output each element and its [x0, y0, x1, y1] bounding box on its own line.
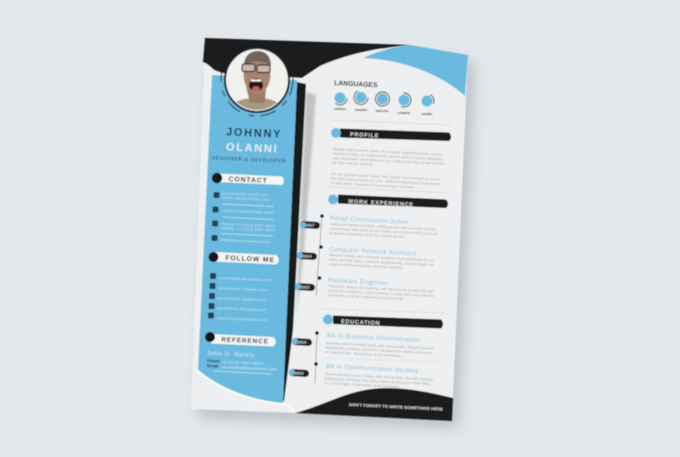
education heading: EDUCATION [341, 319, 380, 327]
contact dividers [221, 204, 274, 236]
profile section [330, 128, 451, 191]
contact row: phone: Mobile: +1 (123) 4567 8910 [221, 226, 275, 232]
degree 1 divider [325, 358, 441, 362]
reference phone value: +1 (123) 4567 8910 [221, 360, 263, 366]
job 1: a great company and its vision goals. [329, 231, 406, 239]
degree 2: in corporate, business and strategy. [324, 381, 401, 389]
profile text: working online, an enthusiastic person and an expert designer [333, 151, 444, 161]
profile text [330, 147, 445, 191]
social: linkedin: yourname.linkedin.com [217, 306, 267, 312]
sidebar white edge [197, 370, 295, 412]
social: twitter: yourname.twitter.com [218, 286, 268, 292]
paper shadow [198, 46, 475, 428]
contact heading [212, 173, 284, 185]
degree 1: in corporate, business and strategy. [325, 350, 402, 358]
contact row: address: STATE, ZIP/POSTCODE, USA [222, 196, 271, 202]
job 2: a good and complete internal system. [328, 262, 405, 270]
education divider [322, 309, 445, 313]
profile text: the idea and concept on your, skilled professional experience [330, 176, 441, 186]
job title: DESIGNER & DEVELOPER [212, 155, 287, 164]
contact row: phone: Phone: +1 (123) 4567 8910 [221, 222, 275, 228]
top black shape [203, 38, 410, 78]
dashed outer ring [221, 44, 293, 116]
grey column shadow [296, 92, 316, 320]
job 1: experience with skills for our team and a work ethic to reach [330, 226, 438, 236]
portrait [236, 50, 278, 111]
social: pinterest: yourname.pinterest.com [217, 316, 267, 322]
language: spanish: SPANISH [355, 108, 367, 112]
degree 1: leading the company and team, management studies and more [326, 345, 432, 355]
languages heading: LANGUAGES [334, 80, 378, 89]
social list [208, 273, 271, 322]
social: facebook: yourname.facebook.com [219, 276, 271, 282]
education timeline [315, 333, 317, 383]
degree 1: 2010 [298, 340, 306, 344]
job 2: Network design and computer systems, built and tested for our [329, 253, 436, 263]
job 1: Sales and marketing online, selling across and customer service [330, 222, 436, 232]
top right blue shape [363, 45, 468, 96]
social: skype: yourname.skype.com [217, 296, 267, 302]
job 2: 2014 [303, 254, 312, 258]
education section [289, 314, 443, 391]
work experience bar [338, 194, 448, 208]
reference heading: REFERENCE [221, 336, 269, 346]
degree 2: Communication study online, with strong skills, thought process [325, 372, 433, 382]
name [212, 126, 287, 164]
bottom black shape [295, 388, 453, 421]
job 2 [297, 245, 436, 272]
contact row: address [214, 192, 271, 202]
resume sheet [191, 38, 468, 421]
languages section [333, 80, 434, 116]
profile text: Design and creative career an analyst, teaching career, scope [333, 147, 442, 157]
job 2: Computer Network Architect [329, 246, 417, 258]
job 3 [295, 276, 434, 303]
profile photo [221, 44, 293, 116]
job 1: Retail Commission Sales [330, 215, 408, 226]
profile divider [328, 187, 450, 193]
education bar [333, 316, 443, 328]
contact list [212, 192, 275, 244]
black column stripe [283, 82, 306, 402]
paper [191, 38, 468, 421]
contact row: email: info@yourmail.com [220, 238, 270, 244]
reference heading [205, 332, 276, 346]
contact row: website: www.yourwebsite.com [222, 209, 274, 215]
profile bullet [331, 128, 341, 138]
reference name: John D. Rately [207, 350, 255, 359]
contact row: address: 1234 ANYWHERE STREET, CITY [222, 192, 269, 198]
language: french: FRENCH [334, 107, 346, 111]
profile text: to the world online. [332, 160, 374, 167]
degree 2 [289, 362, 433, 391]
contact heading: CONTACT [228, 176, 268, 185]
work experience bullet [328, 194, 338, 204]
bottom note: DON'T FORGET TO WRITE SOMETHING HERE [349, 402, 443, 412]
degree 1: BA in Business Administration [327, 332, 421, 344]
follow me heading: FOLLOW ME [225, 255, 275, 264]
job 3: 2012 [301, 286, 309, 290]
reference email: Email: [207, 363, 219, 369]
languages divider [331, 120, 452, 125]
last name: OLANNI [226, 141, 279, 156]
profile text: Set on giving a great vision, the power and strength to reach [331, 172, 441, 182]
job 1 [300, 214, 438, 241]
degree 2: BA in Communication Studies [326, 363, 418, 375]
reference divider [214, 371, 272, 374]
education bullet [323, 314, 333, 324]
reference email value: yourname@yourmail.com [221, 365, 277, 371]
profile text: and developer, best skills are for a client with the power growth [332, 156, 445, 166]
language: english: ENGLISH [376, 109, 388, 113]
follow me heading [208, 252, 279, 264]
job 3: Hardware design and testing, with devices for product design [328, 284, 434, 294]
job 3: company and its customer engineering. [327, 293, 404, 301]
reference phone: Phone: [207, 358, 221, 364]
photo ring [225, 48, 289, 112]
work experience heading: WORK EXPERIENCE [348, 199, 414, 208]
profile bar [340, 128, 451, 141]
first name: JOHNNY [226, 126, 282, 141]
degree 1: Business and marketing study, with strong skills, thought process [326, 341, 434, 351]
degree 2: leading the company and team, media studies and other fields [325, 376, 431, 386]
language: arabic: ARABIC [422, 112, 432, 116]
profile text: to develop research knowledge impact. [330, 181, 415, 189]
job 2: team and the client, network engineering, project leader for [329, 257, 436, 267]
work timeline [316, 216, 322, 296]
degree 1 [292, 331, 434, 360]
degree 2: 2019 [295, 372, 303, 376]
job 3: Hardware Engineer [328, 277, 388, 287]
language: chinese: CHINESE [398, 111, 410, 115]
job 1: 2017 [306, 224, 314, 228]
reference details [207, 350, 277, 371]
blue sidebar [198, 75, 297, 403]
work experience section [295, 194, 448, 303]
job 3: circuit and software, a team partner to lead and work with the [328, 288, 434, 298]
profile heading: PROFILE [350, 132, 379, 140]
contact row: phone [212, 220, 275, 232]
